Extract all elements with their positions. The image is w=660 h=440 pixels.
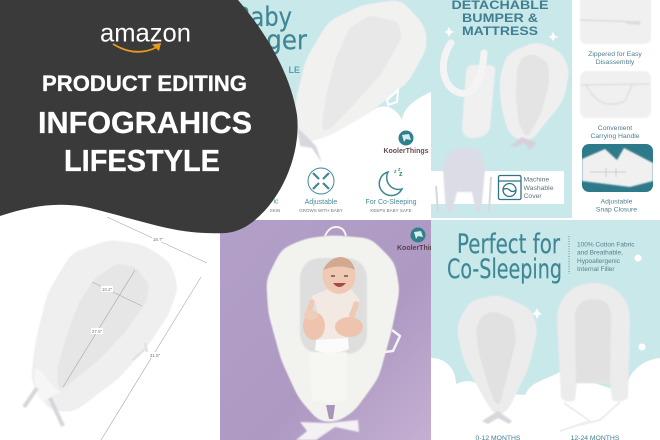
heading: Co-Sleeping bbox=[447, 254, 562, 285]
logo: KoolerThings bbox=[397, 245, 442, 252]
caption: zipper: Zippered for Easy bbox=[588, 51, 642, 58]
detail: carrying handle bbox=[580, 71, 651, 118]
heading: baby lounger: Baby bbox=[235, 2, 292, 33]
caption: snap closure: Adjustable bbox=[601, 198, 633, 206]
caption: handle: Convenient bbox=[598, 125, 632, 132]
fabric text: Internal Filler bbox=[577, 266, 615, 273]
washable text: Cover bbox=[524, 193, 542, 200]
dark title blob bbox=[0, 0, 298, 233]
nest bbox=[24, 242, 176, 426]
age labels bbox=[476, 436, 620, 440]
icon: moon: z bbox=[398, 167, 401, 173]
panel: detachable bumper and mattress bbox=[431, 0, 572, 218]
dimension labels: 27.5" bbox=[92, 329, 103, 334]
washable text: Machine bbox=[524, 176, 549, 184]
baby head bbox=[322, 258, 356, 294]
heading: baby lounger bbox=[243, 5, 308, 54]
dimension lines bbox=[63, 217, 207, 440]
panel: perfect for co-sleeping bbox=[431, 220, 660, 440]
heading: lifestyle: LIFESTYLE bbox=[64, 143, 220, 178]
panel: dimensions bbox=[24, 217, 207, 440]
clouds bbox=[258, 92, 431, 218]
baby hair bbox=[323, 257, 355, 270]
clouds bbox=[431, 358, 660, 440]
brand logo: KoolerThings: KoolerThings bbox=[383, 148, 429, 155]
lower mattress bbox=[312, 352, 347, 354]
heading: MATTRESS bbox=[462, 24, 538, 38]
machine washable callout bbox=[431, 171, 564, 204]
fabric text: Hypoallergenic bbox=[577, 258, 621, 265]
heading bbox=[452, 0, 548, 38]
washable text: Washable bbox=[524, 185, 554, 192]
feature captions: GROWS WITH BABY bbox=[299, 208, 343, 213]
fabric text: and Breathable, bbox=[577, 250, 623, 256]
baby onesie bbox=[312, 289, 360, 340]
washable text bbox=[524, 176, 554, 200]
baby leg left bbox=[303, 312, 325, 340]
feature captions: Adjustable bbox=[305, 199, 337, 206]
sparkles and dots bbox=[532, 254, 646, 350]
heading: baby lounger: Lounger bbox=[207, 25, 308, 56]
icon: moon: z bbox=[399, 171, 403, 178]
baby foot bbox=[304, 310, 318, 320]
icon: adjustable bbox=[308, 168, 334, 194]
icon: moon bbox=[379, 167, 403, 196]
brand logo: KoolerThings bbox=[383, 130, 429, 155]
caption: zipper: Disassembly bbox=[596, 59, 635, 66]
baby bbox=[303, 257, 363, 353]
caption: handle: Carrying Handle bbox=[590, 133, 640, 140]
icon: washing machine bbox=[498, 176, 521, 200]
dimension labels: 18.7" bbox=[153, 237, 164, 242]
baby mouth bbox=[333, 283, 346, 287]
caption: zipper bbox=[588, 51, 642, 66]
bumper bbox=[443, 43, 484, 93]
nest bbox=[501, 43, 568, 150]
heading: infographics: INFOGRAHICS bbox=[38, 105, 252, 140]
detail: zipper bbox=[580, 0, 651, 44]
feature captions: For Co-Sleeping bbox=[366, 199, 417, 206]
mattress bbox=[300, 258, 367, 354]
heading: BUMPER & bbox=[462, 11, 538, 25]
heading bbox=[447, 229, 562, 285]
heading: Perfect for bbox=[457, 229, 561, 260]
dotted divider bbox=[568, 236, 570, 274]
nest bbox=[297, 2, 425, 163]
baby leg right bbox=[335, 317, 363, 337]
label: bundle: LE bbox=[288, 65, 300, 75]
nest handle bbox=[325, 227, 346, 236]
amazon logo: amazon bbox=[100, 18, 191, 48]
nest bbox=[268, 237, 398, 420]
baby eyes bbox=[331, 275, 348, 277]
sparkles bbox=[444, 27, 559, 41]
cover bbox=[443, 148, 485, 212]
feature captions: KEEPS BABY SAFE bbox=[370, 208, 412, 213]
side handle bbox=[384, 330, 400, 352]
feature captions: ic bbox=[273, 198, 279, 206]
panel: baby lounger product bbox=[238, 0, 431, 212]
dimension labels: 10.2" bbox=[102, 287, 113, 292]
dimension labels: 31.5" bbox=[150, 353, 161, 358]
caption: snap closure: Snap Closure bbox=[596, 206, 637, 214]
feature captions bbox=[270, 198, 417, 213]
fabric text: 100% Cotton Fabric bbox=[577, 242, 635, 248]
mattress bbox=[462, 65, 495, 138]
baby arms bbox=[308, 302, 356, 322]
center slot bbox=[326, 405, 335, 419]
cover straps bbox=[436, 177, 491, 212]
detail: snap closure bbox=[582, 144, 653, 192]
icon: moon: z bbox=[394, 169, 397, 175]
panel: feature details bbox=[580, 0, 653, 214]
dimension labels bbox=[91, 236, 164, 358]
heading: product editing: PRODUCT EDITING bbox=[42, 71, 247, 96]
baby diaper bbox=[315, 338, 349, 353]
nest: 12-24 months bbox=[557, 283, 630, 431]
panel: lifestyle photo bbox=[220, 220, 442, 440]
ribbon bbox=[296, 420, 359, 440]
logo bbox=[397, 228, 431, 250]
nest: 0-12 months bbox=[458, 296, 536, 424]
feature captions: SKIN bbox=[270, 208, 280, 213]
caption: snap closure bbox=[596, 198, 637, 214]
caption: handle bbox=[590, 125, 640, 140]
fabric text bbox=[577, 242, 635, 273]
